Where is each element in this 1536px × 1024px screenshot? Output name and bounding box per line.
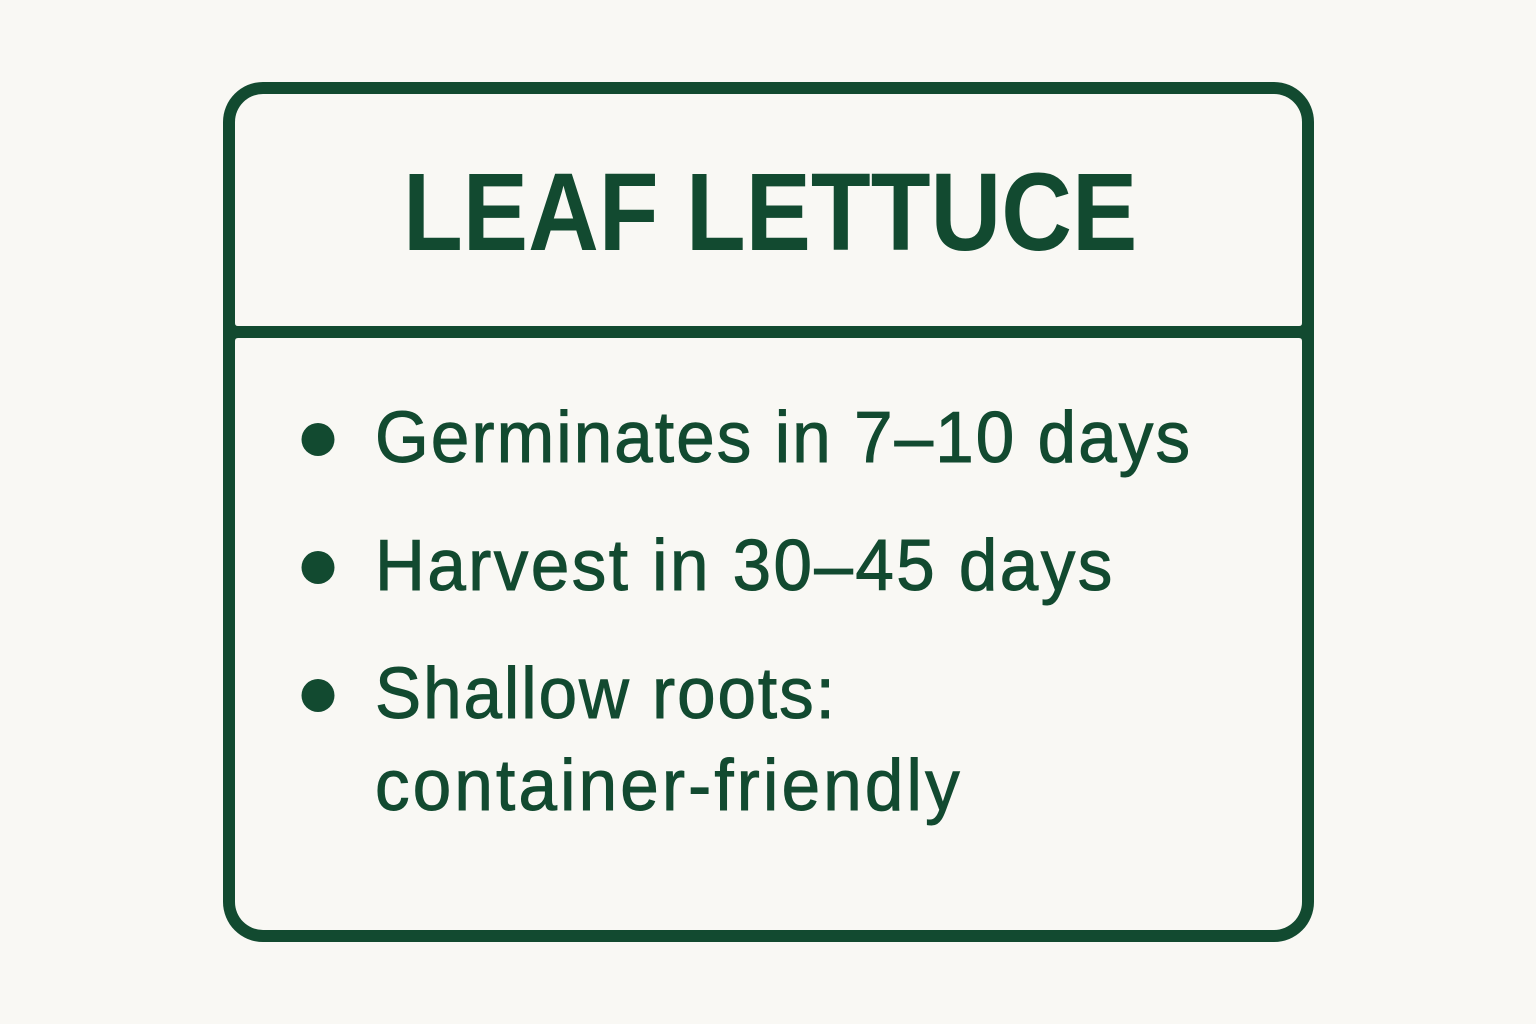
bullet: roots	[302, 653, 960, 825]
bullet: roots: Shallow roots:	[375, 653, 835, 733]
bullet: harvest: Harvest in 30–45 days	[375, 525, 1112, 605]
bullet: roots: container-friendly	[375, 745, 960, 825]
bullet: germination: Germinates in 7–10 days	[375, 397, 1190, 477]
card frame with header divider	[223, 82, 1314, 942]
title: LEAF LETTUCE	[403, 152, 1137, 274]
bullet list	[302, 397, 1190, 825]
